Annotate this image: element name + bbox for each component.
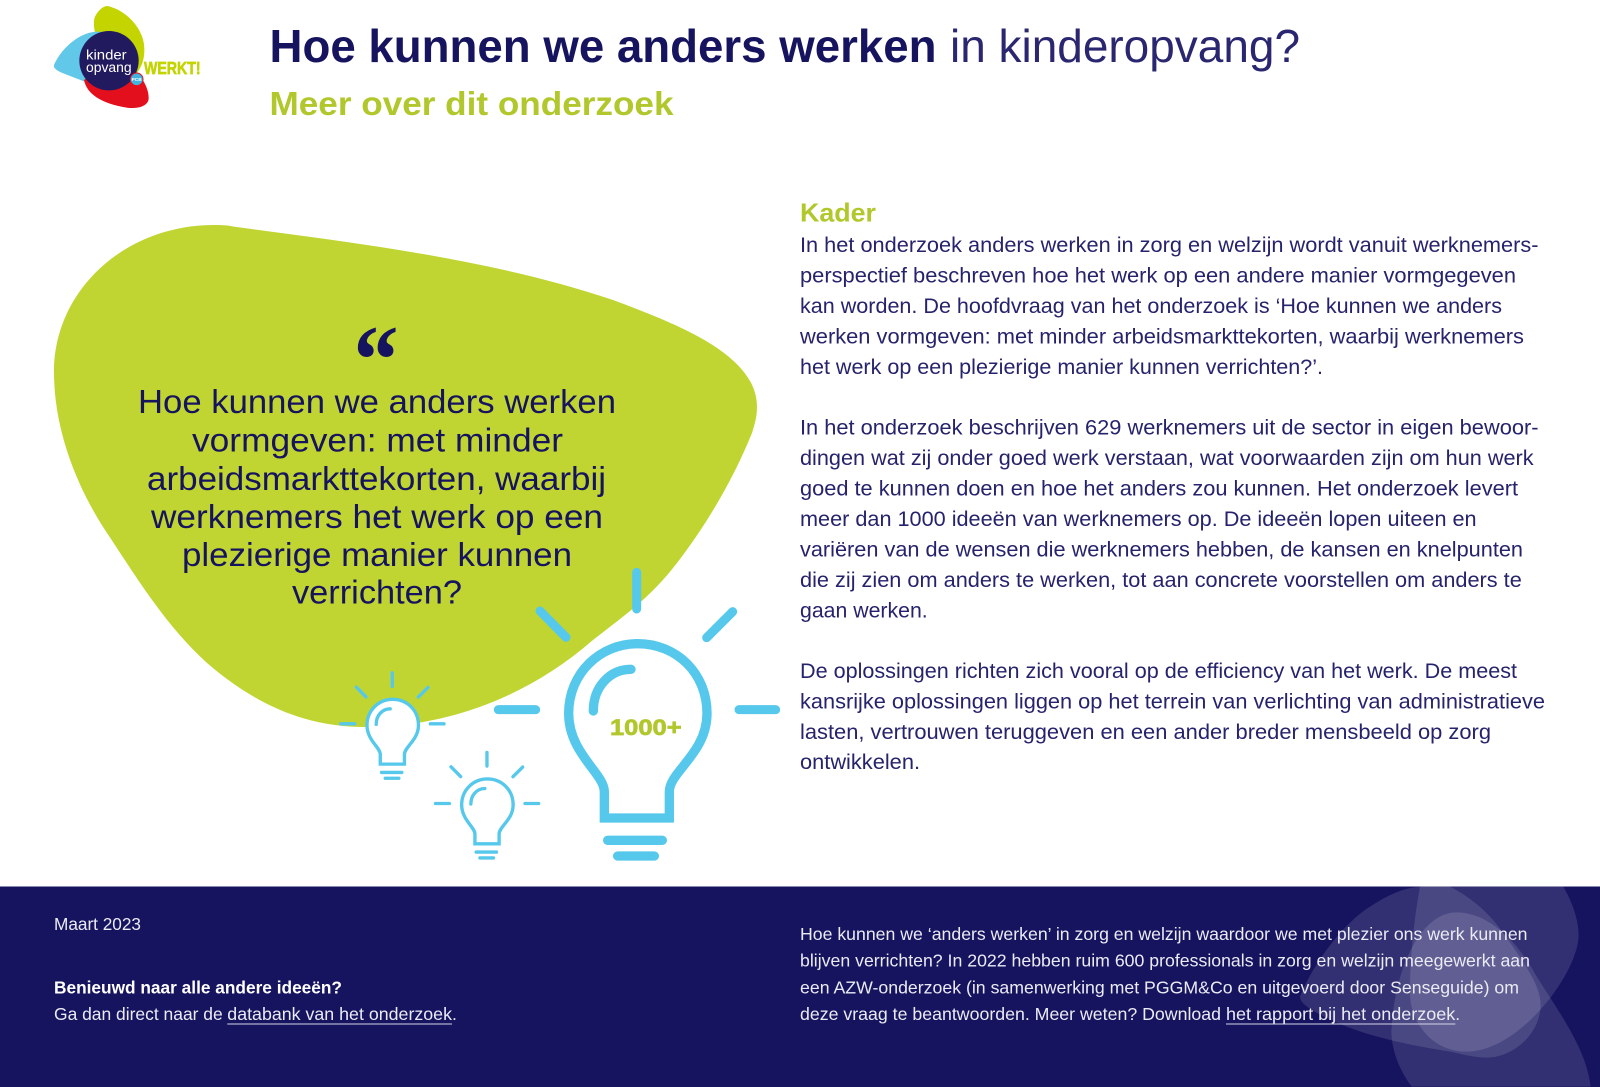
icon: large light bulb with 1000+ (498, 572, 776, 856)
text block: paragraph 2: meer dan 1000 ideeën van werknemers op. De ideeën lopen uiteen en (800, 508, 1477, 531)
quote text: verrichten? (292, 574, 462, 612)
footer call to action (54, 977, 457, 1024)
footer description (800, 924, 1530, 1024)
text block: paragraph 1: het werk op een plezierige manier kunnen verrichten?’. (800, 356, 1323, 379)
footer description: . (1455, 1004, 1460, 1024)
title (270, 20, 1300, 72)
text block: paragraph 2: die zij zien om anders te werken, tot aan concrete voorstellen om anders te (800, 569, 1522, 592)
subtitle: Meer over dit onderzoek (270, 85, 674, 122)
text block: paragraph 2 (800, 417, 1538, 622)
text block: paragraph 1: kan worden. De hoofdvraag van het onderzoek is ‘Hoe kunnen we anders (800, 295, 1502, 318)
heading: Kader: Kader (800, 198, 876, 228)
logo: kinderopvang werkt: WERKT! (144, 58, 201, 78)
footer description: een AZW-onderzoek (in samenwerking met PGGM&Co en uitgevoerd door Senseguide) om (800, 977, 1519, 997)
icon: large light bulb with 1000+: 1000+ (610, 715, 682, 740)
quote text: vormgeven: met minder (192, 422, 563, 460)
title: Hoe kunnen we anders werken (270, 20, 936, 72)
text block: paragraph 2: dingen wat zij onder goed werk verstaan, wat voorwaarden zijn om hun werk (800, 447, 1534, 470)
text block: paragraph 3: lasten, vertrouwen teruggeven en een ander breder mensbeeld op zorg (800, 721, 1491, 744)
text block: paragraph 3: ontwikkelen. (800, 751, 920, 774)
text block: paragraph 3 (800, 660, 1545, 774)
logo: kinderopvang werkt: PCB (132, 77, 142, 82)
footer call to action: databank van het onderzoek (227, 1004, 452, 1024)
icon: quotation mark: “ (354, 306, 398, 414)
quote text: plezierige manier kunnen (182, 537, 572, 574)
footer call to action: Ga dan direct naar de (54, 1004, 223, 1024)
quote text: arbeidsmarkttekorten, waarbij (147, 461, 606, 498)
panel: footer (0, 886, 1600, 1087)
footer description: Hoe kunnen we ‘anders werken’ in zorg en welzijn waardoor we met plezier ons werk kunnen (800, 924, 1528, 944)
logo: kinderopvang werkt (54, 6, 201, 108)
footer decorative blobs (1300, 887, 1591, 1087)
footer description: deze vraag te beantwoorden. Meer weten? Download (800, 1004, 1221, 1024)
icon: small light bulb left (341, 673, 444, 778)
panel: green quote blob (54, 225, 757, 727)
footer description: blijven verrichten? In 2022 hebben ruim 600 professionals in zorg en welzijn meegewerkt aan (800, 951, 1530, 971)
footer call to action: Benieuwd naar alle andere ideeën? (54, 977, 342, 997)
text block: paragraph 2: variëren van de wensen die werknemers hebben, de kansen en knelpunten (800, 538, 1523, 562)
text block: paragraph 1 (799, 234, 1538, 379)
icon: small light bulb bottom (436, 752, 539, 858)
quote text (138, 384, 616, 612)
footer date: Maart 2023 (54, 914, 141, 934)
text block: paragraph 2: In het onderzoek beschrijven 629 werknemers uit de sector in eigen bewoor- (800, 417, 1538, 440)
text block: paragraph 1: werken vormgeven: met minder arbeidsmarkttekorten, waarbij werknemers (799, 325, 1524, 348)
text block: paragraph 1: In het onderzoek anders werken in zorg en welzijn wordt vanuit werknemers- (800, 234, 1538, 257)
text block: paragraph 2: gaan werken. (800, 599, 928, 622)
quote text: Hoe kunnen we anders werken (138, 384, 616, 421)
logo: kinderopvang werkt: kinder (86, 47, 127, 62)
quote text: werknemers het werk op een (150, 499, 603, 536)
footer call to action: . (452, 1004, 457, 1024)
logo: kinderopvang werkt: opvang (86, 60, 132, 75)
footer description: het rapport bij het onderzoek (1226, 1004, 1456, 1024)
text block: paragraph 3: De oplossingen richten zich vooral op de efficiency van het werk. De meest (800, 660, 1517, 683)
text block: paragraph 2: goed te kunnen doen en hoe het anders zou kunnen. Het onderzoek levert (800, 478, 1518, 501)
text block: paragraph 1: perspectief beschreven hoe het werk op een andere manier vormgegeven (800, 264, 1516, 288)
text block: paragraph 3: kansrijke oplossingen liggen op het terrein van verlichting van administratieve (800, 690, 1545, 714)
title: in kinderopvang? (950, 20, 1300, 72)
